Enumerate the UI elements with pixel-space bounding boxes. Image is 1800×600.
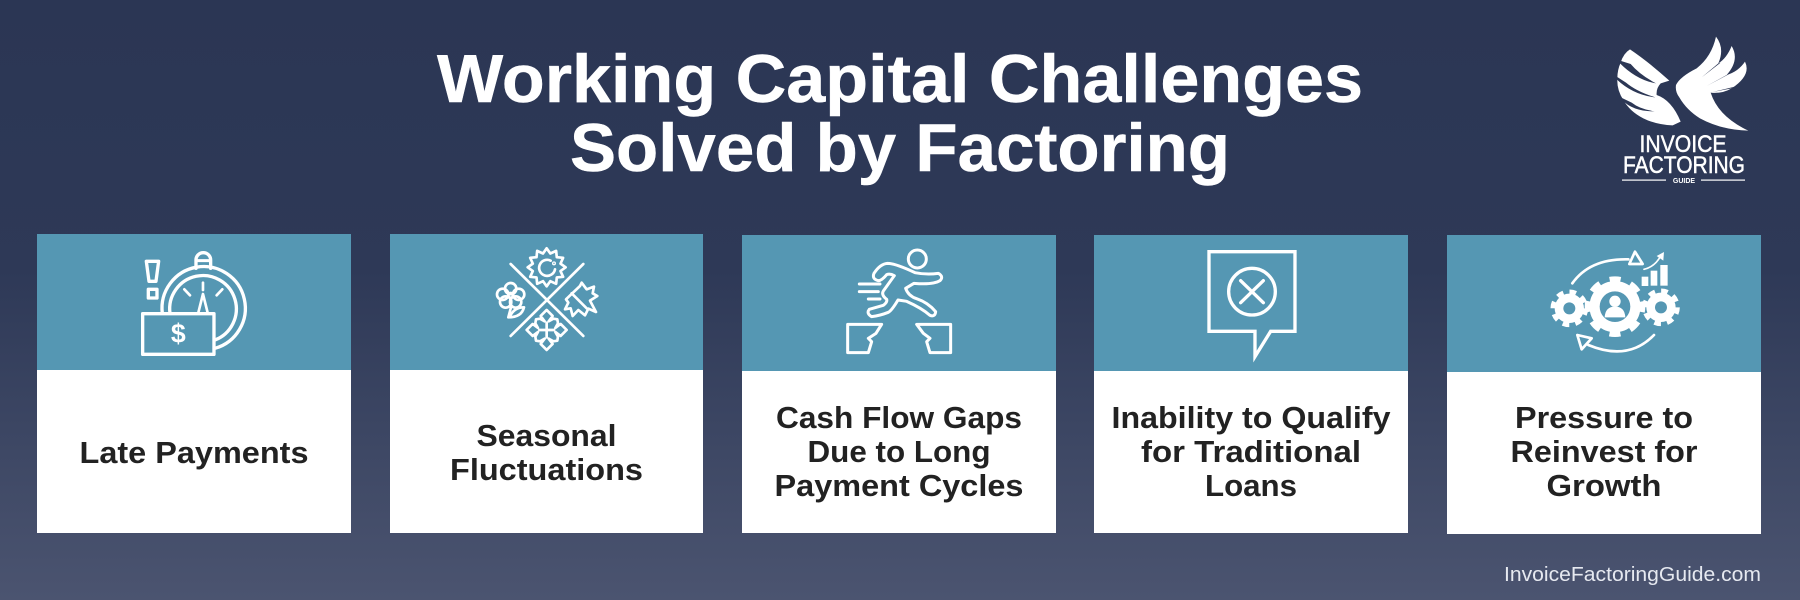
- label: seasonal fluctuations: Fluctuations: [450, 452, 643, 487]
- label: pressure to reinvest: Growth: [1546, 468, 1662, 503]
- panel: reinvest for growth: [1447, 235, 1761, 534]
- title: Working Capital Challenges: [437, 41, 1363, 117]
- label: late payments: Late Payments: [80, 435, 308, 470]
- icon: stopwatch and dollar bill: $: [171, 319, 186, 349]
- logo: Invoice Factoring Guide: [1617, 37, 1748, 185]
- icon: gears and growth: [1553, 252, 1677, 351]
- title: Solved by Factoring: [570, 110, 1230, 186]
- label: inability to qualify: Loans: [1205, 468, 1297, 503]
- icon: runner jumping a gap: [848, 250, 951, 353]
- label: cash flow gaps: Payment Cycles: [774, 468, 1024, 503]
- label: pressure to reinvest: Pressure to: [1515, 400, 1693, 435]
- label: seasonal fluctuations: [450, 418, 643, 487]
- logo: Invoice Factoring Guide: FACTORING: [1623, 152, 1745, 179]
- label: pressure to reinvest: [1510, 400, 1698, 503]
- footer website: InvoiceFactoringGuide.com: [1504, 564, 1761, 586]
- logo: Invoice Factoring Guide: GUIDE: [1673, 178, 1695, 185]
- label: inability to qualify: [1112, 400, 1391, 503]
- title: [437, 41, 1363, 186]
- icon: four seasons: [497, 248, 597, 350]
- icon: stopwatch and dollar bill: [143, 253, 245, 354]
- label: pressure to reinvest: Reinvest for: [1510, 434, 1698, 469]
- label: cash flow gaps: [774, 400, 1024, 503]
- label: cash flow gaps: Due to Long: [808, 434, 990, 469]
- label: inability to qualify: for Traditional: [1141, 434, 1361, 469]
- panel: seasonal fluctuations: [390, 234, 703, 533]
- logo: Invoice Factoring Guide: INVOICE: [1640, 131, 1726, 158]
- label: seasonal fluctuations: Seasonal: [476, 418, 616, 453]
- panel: traditional loans: [1094, 235, 1408, 533]
- label: inability to qualify: Inability to Qualify: [1112, 400, 1391, 435]
- panel: late payments: [37, 234, 351, 533]
- icon: speech bubble with X: [1209, 252, 1295, 357]
- label: cash flow gaps: Cash Flow Gaps: [776, 400, 1022, 435]
- panel: cash flow gaps: [742, 235, 1056, 533]
